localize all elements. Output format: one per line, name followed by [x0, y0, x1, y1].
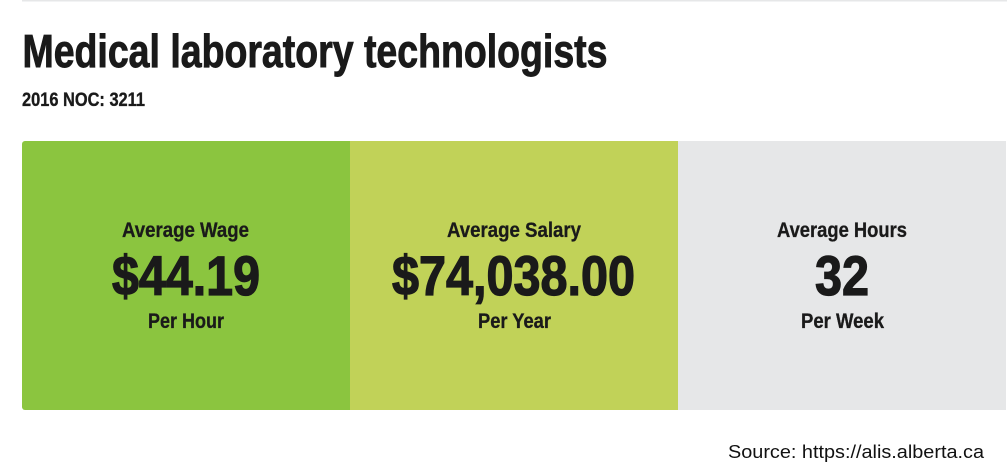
value: salary: $74,038.00: [392, 244, 635, 307]
unit: per year: Per Year: [478, 310, 551, 333]
subtitle: NOC code: 2016 NOC: 3211: [22, 90, 145, 111]
title: Medical laboratory technologists: [22, 25, 608, 77]
label: average salary: Average Salary: [447, 219, 581, 242]
panel: average wage: [22, 141, 350, 410]
unit: per hour: Per Hour: [148, 310, 224, 333]
label: average hours: Average Hours: [777, 219, 907, 242]
panel: average hours: [678, 141, 1006, 410]
source note: Source: https://alis.alberta.ca: [728, 441, 985, 462]
unit: per week: Per Week: [801, 310, 884, 333]
value: hours: 32: [815, 244, 869, 307]
label: average wage: Average Wage: [122, 219, 249, 242]
panel: average salary: [350, 141, 678, 410]
value: wage: $44.19: [112, 244, 260, 307]
